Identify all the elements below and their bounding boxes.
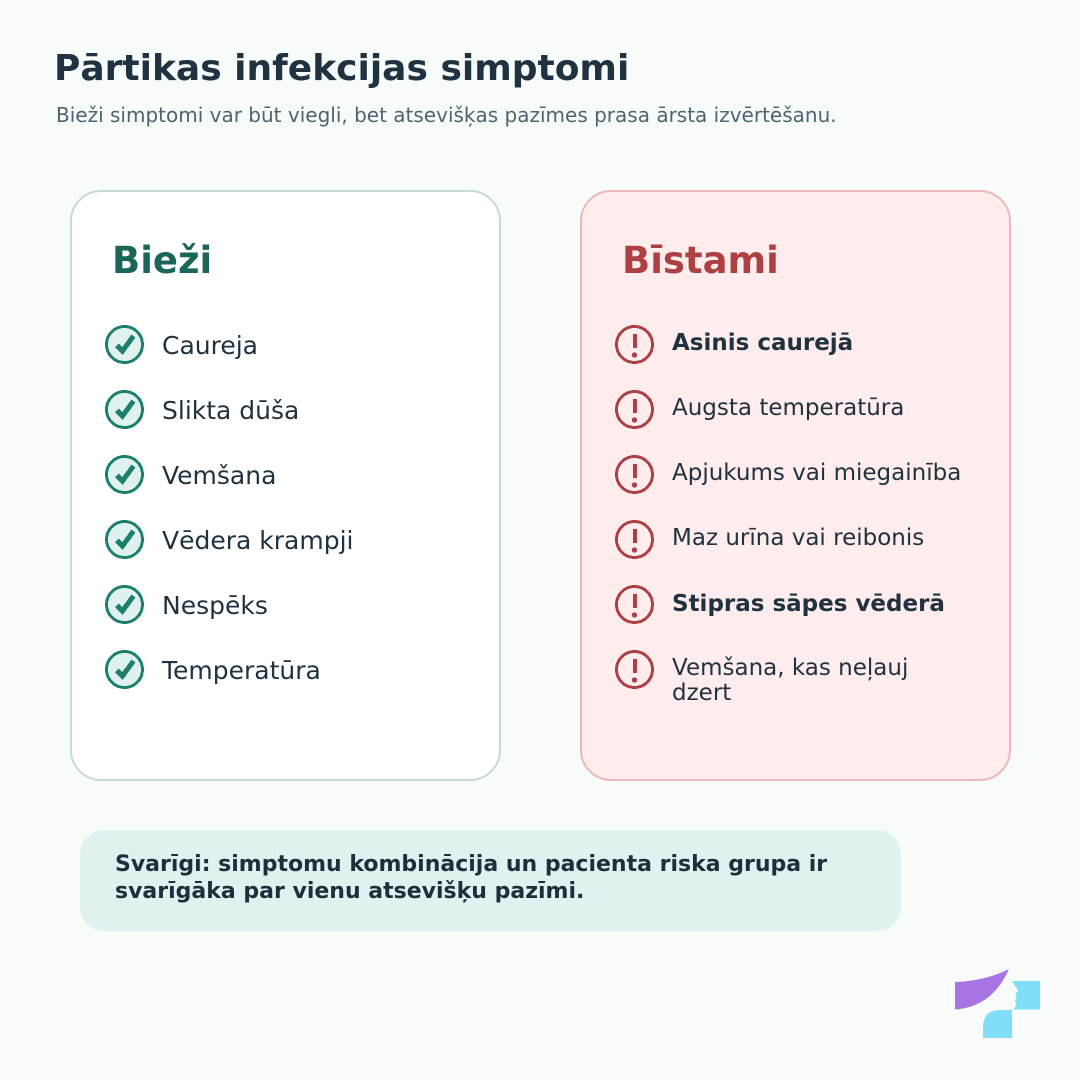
item: Asinis caurejā: Asinis caurejā: [672, 330, 853, 356]
item: Vēdera krampji: Vēdera krampji: [162, 526, 353, 555]
callout: [80, 830, 901, 931]
item: Asinis caurejā: [616, 326, 853, 362]
item: Apjukums vai miegainība: [616, 456, 961, 492]
item: Vemšana: [106, 456, 276, 492]
panel: common symptoms: [71, 191, 500, 780]
subtitle: Bieži simptomi var būt viegli, bet atsevišķas pazīmes prasa ārsta izvērtēšanu.: [56, 103, 837, 127]
title: Pārtikas infekcijas simptomi: [54, 48, 629, 89]
item: Vemšana, kas neļauj dzert: [616, 652, 908, 706]
item: Slikta dūša: Slikta dūša: [162, 396, 299, 425]
item: Apjukums vai miegainība: Apjukums vai miegainība: [672, 460, 961, 486]
item: Nespēks: Nespēks: [162, 591, 268, 620]
heading: Bīstami: Bīstami: [622, 239, 779, 282]
item: Stipras sāpes vēderā: Stipras sāpes vēderā: [672, 591, 945, 617]
item: Caureja: Caureja: [162, 331, 258, 360]
item: Vemšana, kas neļauj dzert: Vemšana, kas neļauj: [672, 655, 908, 681]
item: Nespēks: [106, 586, 268, 622]
heading: Bieži: Bieži: [112, 239, 212, 282]
callout: Svarīgi: simptomu kombinācija un pacienta riska grupa ir: [115, 852, 827, 877]
item: Stipras sāpes vēderā: [616, 586, 945, 622]
item: Temperatūra: [106, 652, 321, 688]
item: Maz urīna vai reibonis: [616, 522, 924, 558]
item: Slikta dūša: [106, 392, 299, 428]
item: Augsta temperatūra: [616, 392, 904, 428]
panel: dangerous symptoms: [581, 191, 1010, 780]
item: Vemšana: Vemšana: [162, 461, 276, 490]
item: Temperatūra: Temperatūra: [161, 656, 321, 685]
item: Augsta temperatūra: Augsta temperatūra: [672, 395, 904, 421]
logo: [955, 969, 1040, 1038]
item: Vemšana, kas neļauj dzert: dzert: [672, 680, 731, 706]
item: Vēdera krampji: [106, 522, 353, 558]
callout: svarīgāka par vienu atsevišķu pazīmi.: [115, 879, 584, 904]
item: Maz urīna vai reibonis: Maz urīna vai reibonis: [672, 525, 924, 551]
item: Caureja: [106, 326, 258, 362]
